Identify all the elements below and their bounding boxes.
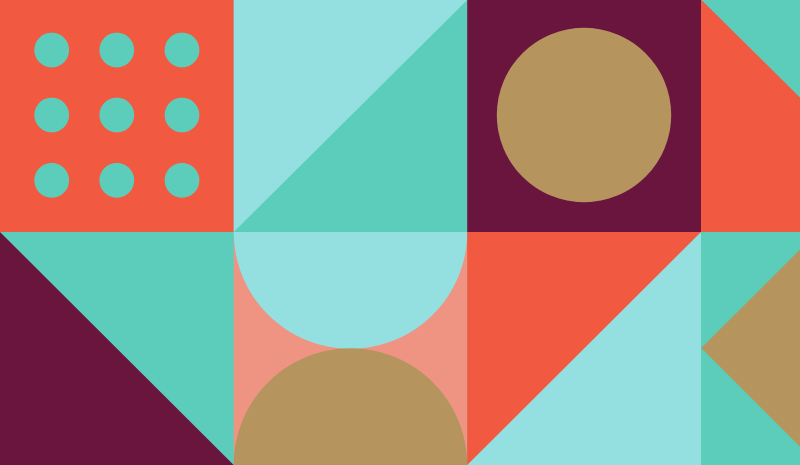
panel: maroon tile with tan circle: [467, 0, 701, 232]
panel: light blue and teal diagonal tile: [234, 0, 467, 232]
panel: red tile with teal dots: [0, 0, 234, 232]
panel: red and light blue diagonal tile: [467, 232, 701, 465]
panel: teal tile with tan diamond: [701, 232, 800, 465]
panel: red and teal corner tile: [701, 0, 800, 232]
panel: teal and maroon diagonal tile: [0, 232, 234, 465]
dot grid: [34, 33, 199, 198]
panel: pink tile with two semicircles: [234, 232, 467, 465]
